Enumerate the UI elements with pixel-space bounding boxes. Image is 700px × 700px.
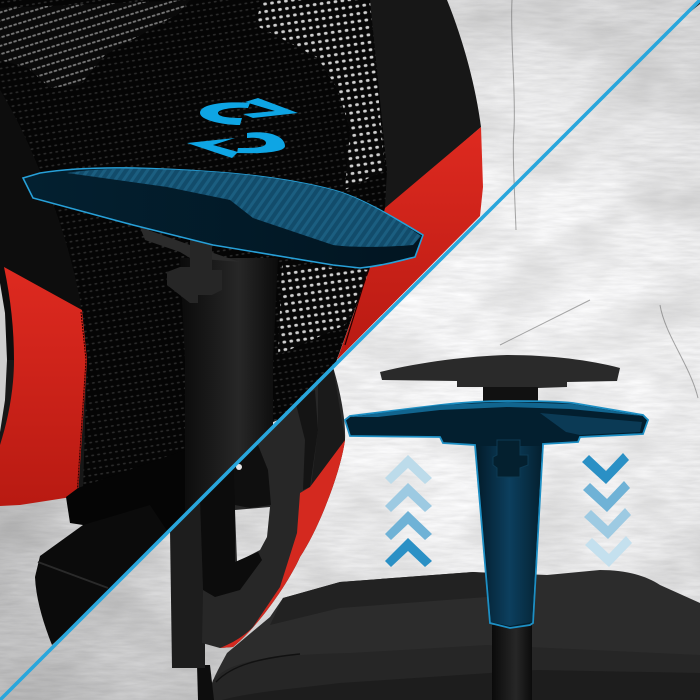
backrest frame post <box>170 495 205 668</box>
pad facet <box>540 413 642 435</box>
chair leg <box>197 665 214 700</box>
cushion seam <box>38 562 108 588</box>
carbon top surface <box>67 169 421 247</box>
armrest adjustment knob <box>167 238 222 303</box>
seat bottom band <box>212 679 214 683</box>
light spot in knob <box>236 464 242 470</box>
mesh backrest <box>0 0 387 490</box>
icon: rotation arrow bottom <box>187 132 285 158</box>
lower red trim <box>220 440 345 648</box>
blue highlighted T armrest <box>345 401 648 628</box>
armrest mount <box>140 228 230 261</box>
lower armrest raised pad <box>380 355 620 405</box>
left black wing of the backrest <box>0 90 87 360</box>
panel: upper-left close-up of chair backrest <box>0 0 483 645</box>
tilt knob <box>233 445 271 508</box>
left red side panel <box>0 267 87 506</box>
panel: lower-right view of chair and arm <box>170 0 700 700</box>
bright mesh highlight top left <box>0 0 190 88</box>
seat cushion <box>207 570 700 700</box>
tapered blue post <box>477 446 542 626</box>
lumbar cushion <box>35 525 159 645</box>
bright mesh highlight top right <box>255 0 385 190</box>
inner black support <box>200 465 262 597</box>
icon: upward chevrons <box>385 455 432 567</box>
red panel seam <box>345 270 368 345</box>
lower chair post below arm <box>492 625 532 700</box>
black outer backrest edge <box>311 367 345 487</box>
right red side panel <box>337 127 483 360</box>
seat top band <box>270 572 486 624</box>
icon: downward chevrons <box>582 453 632 567</box>
backrest ring frame with hole <box>200 367 345 648</box>
left panel stitching <box>77 312 86 496</box>
small armrest fragment top right <box>691 2 700 12</box>
top lip of pad <box>350 402 643 417</box>
upper armrest post <box>180 258 278 518</box>
height lever <box>493 440 528 477</box>
mesh strip on backrest side <box>295 390 318 490</box>
concrete gap at left edge <box>0 283 7 432</box>
black chair back side panels <box>0 0 481 490</box>
icon: rotation arrow top <box>200 98 298 125</box>
upper armrest pad outlined in blue <box>23 168 423 268</box>
lower black backrest block <box>66 453 185 530</box>
bright mesh highlight lower right <box>278 265 372 355</box>
